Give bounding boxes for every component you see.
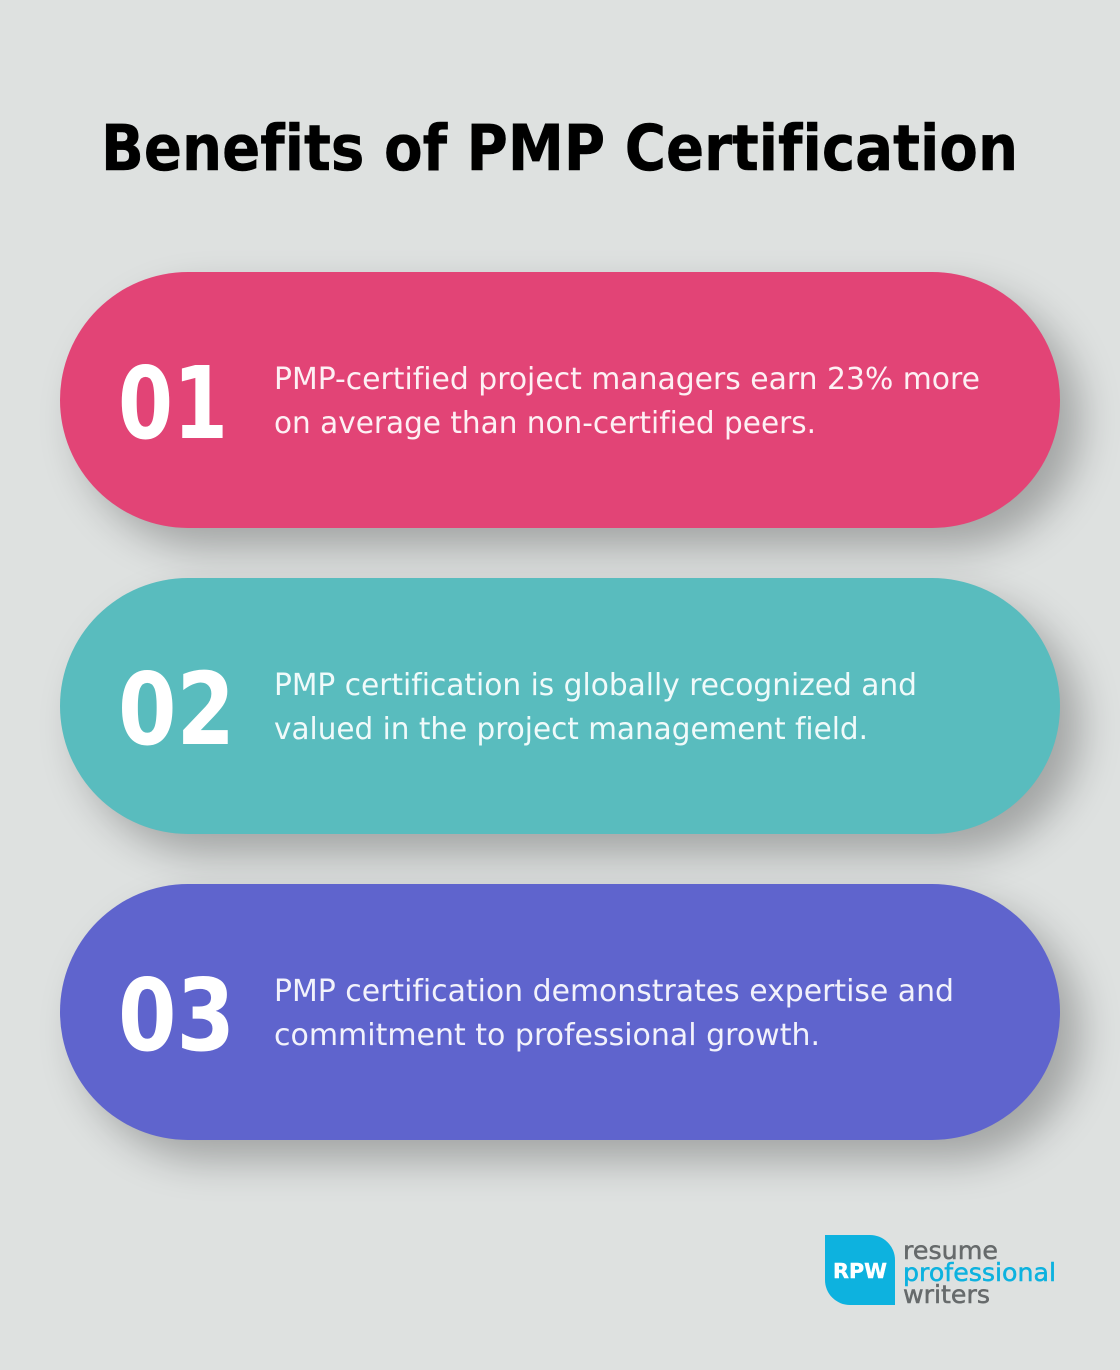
benefit 2 content bbox=[118, 651, 917, 768]
logo initials: RPW bbox=[833, 1259, 887, 1283]
number 03: 03 bbox=[118, 957, 235, 1074]
benefit 1 content bbox=[118, 345, 980, 462]
number 02: 02 bbox=[118, 651, 235, 768]
panel: benefit 2 bbox=[60, 578, 1060, 834]
title: Benefits of PMP Certification bbox=[101, 112, 1018, 185]
benefit 1 text: PMP-certified project managers earn 23% more bbox=[274, 362, 980, 397]
benefit 2 text: valued in the project management field. bbox=[274, 712, 868, 747]
benefit 1 text: on average than non-certified peers. bbox=[274, 406, 816, 441]
logo wordmark: professional bbox=[903, 1258, 1056, 1287]
benefit 3 text: commitment to professional growth. bbox=[274, 1018, 820, 1053]
benefit 3 text: PMP certification demonstrates expertise and bbox=[274, 974, 954, 1009]
benefit 1 text bbox=[274, 362, 980, 441]
logo wordmark: writers bbox=[903, 1280, 990, 1309]
panel: benefit 3 bbox=[60, 884, 1060, 1140]
benefit 2 text bbox=[274, 668, 917, 747]
benefit 3 text bbox=[274, 974, 954, 1053]
logo wordmark: resume bbox=[903, 1236, 998, 1265]
logo wordmark bbox=[903, 1236, 1056, 1309]
icon: RPW badge bbox=[825, 1235, 895, 1305]
panel: benefit 1 bbox=[60, 272, 1060, 528]
benefit 2 text: PMP certification is globally recognized and bbox=[274, 668, 917, 703]
benefit 3 content bbox=[118, 957, 954, 1074]
logo bbox=[825, 1235, 1056, 1309]
number 01: 01 bbox=[118, 345, 228, 462]
